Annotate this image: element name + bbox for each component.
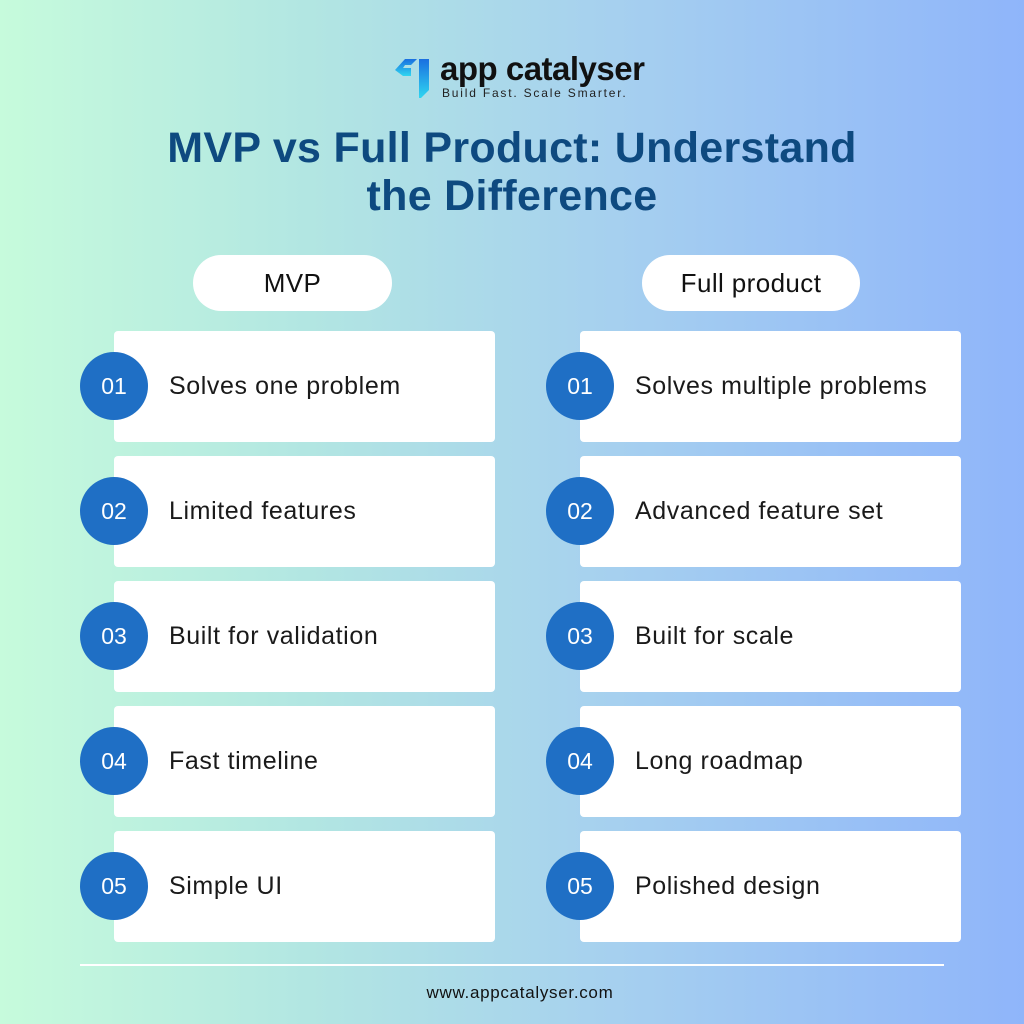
title — [167, 124, 857, 220]
card 03: 03 — [567, 622, 593, 648]
card 05 — [114, 831, 495, 942]
title: the Difference — [367, 172, 657, 220]
card 01: Solves multiple problems — [635, 372, 927, 400]
pill: MVP — [193, 255, 392, 311]
card 01 — [580, 331, 961, 442]
card 02: Limited features — [169, 497, 356, 525]
brand name: app catalyser — [440, 50, 644, 87]
card 04: Fast timeline — [169, 747, 319, 775]
column: Full product — [546, 331, 961, 942]
footer url: www.appcatalyser.com — [427, 983, 613, 1002]
card 05: 05 — [101, 872, 127, 898]
tagline: Build Fast. Scale Smarter. — [442, 86, 628, 100]
column: MVP — [80, 331, 495, 942]
card 02 — [580, 456, 961, 567]
card 01: 01 — [567, 372, 593, 398]
card 01 — [114, 331, 495, 442]
pill: Full product: Full product — [681, 268, 821, 298]
card 05: Polished design — [635, 872, 821, 900]
card 02: Advanced feature set — [635, 497, 883, 525]
card 04 — [114, 706, 495, 817]
card 03: Built for scale — [635, 622, 794, 650]
card 03 — [114, 581, 495, 692]
card 02 — [114, 456, 495, 567]
icon: logo mark — [395, 59, 429, 98]
card 04 — [580, 706, 961, 817]
card 01: Solves one problem — [169, 372, 401, 400]
pill: MVP: MVP — [264, 268, 321, 298]
card 05: 05 — [567, 872, 593, 898]
pill: Full product — [642, 255, 860, 311]
card 03 — [580, 581, 961, 692]
card 03: Built for validation — [169, 622, 378, 650]
card 01: 01 — [101, 372, 127, 398]
card 04: 04 — [101, 748, 127, 774]
card 05: Simple UI — [169, 872, 283, 900]
card 03: 03 — [101, 622, 127, 648]
card 04: Long roadmap — [635, 747, 803, 775]
card 04: 04 — [567, 748, 593, 774]
title: MVP vs Full Product: Understand — [167, 124, 857, 172]
card 02: 02 — [101, 498, 127, 524]
card 02: 02 — [567, 498, 593, 524]
logo — [395, 50, 644, 100]
card 05 — [580, 831, 961, 942]
